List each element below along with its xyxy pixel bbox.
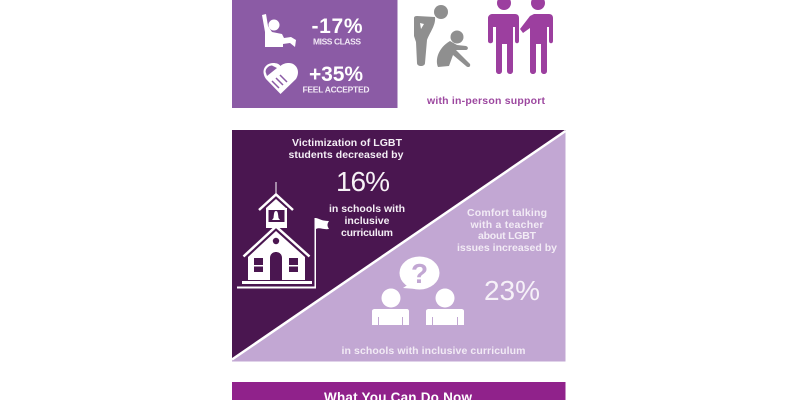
text: comfort talking heading: with a teacher (470, 219, 544, 231)
icon: heart handshake (264, 63, 298, 94)
stat: miss class: MISS CLASS (313, 36, 361, 46)
text: comfort talking heading: about LGBT (478, 230, 537, 242)
stat: feel accepted (302, 63, 370, 94)
text: in schools with inclusive curriculum, light side: in schools with inclusive curriculum (342, 345, 526, 357)
stat: 23%: 23% (484, 275, 540, 306)
stat: miss class: -17% (312, 15, 363, 38)
stat: 16%: 16% (336, 166, 390, 197)
icon: schoolhouse (237, 182, 329, 288)
text: comfort talking heading: issues increased by (457, 242, 557, 254)
stat: feel accepted: +35% (309, 63, 363, 86)
panel: online support stats (232, 0, 398, 108)
text: in schools with inclusive curriculum, dark side: curriculum (341, 227, 393, 239)
diagonal divider (232, 131, 566, 360)
stat: feel accepted: FEEL ACCEPTED (302, 84, 370, 94)
icon: two people with question bubble: ? (411, 258, 428, 289)
icon: purple supportive figures (488, 0, 553, 74)
text: comfort talking heading: Comfort talking (467, 207, 547, 219)
panel: inclusive curriculum (232, 130, 566, 362)
banner: what you can do now (232, 382, 566, 400)
text: victimization heading (288, 137, 404, 161)
text: in schools with inclusive curriculum, dark side: in schools with (329, 203, 405, 215)
text: victimization heading: students decreased by (288, 149, 404, 161)
caption: with in-person support: with in-person support (426, 95, 546, 107)
icon: raised hand student (262, 14, 296, 47)
text: victimization heading: Victimization of LGBT (292, 137, 403, 149)
icon: two people with question bubble (372, 256, 464, 325)
dark triangle background (232, 130, 566, 359)
text: in schools with inclusive curriculum, dark side (329, 203, 405, 239)
text: in schools with inclusive curriculum, dark side: inclusive (344, 215, 390, 227)
text: comfort talking heading (457, 207, 557, 254)
icon: grey bullying figures (414, 5, 470, 67)
